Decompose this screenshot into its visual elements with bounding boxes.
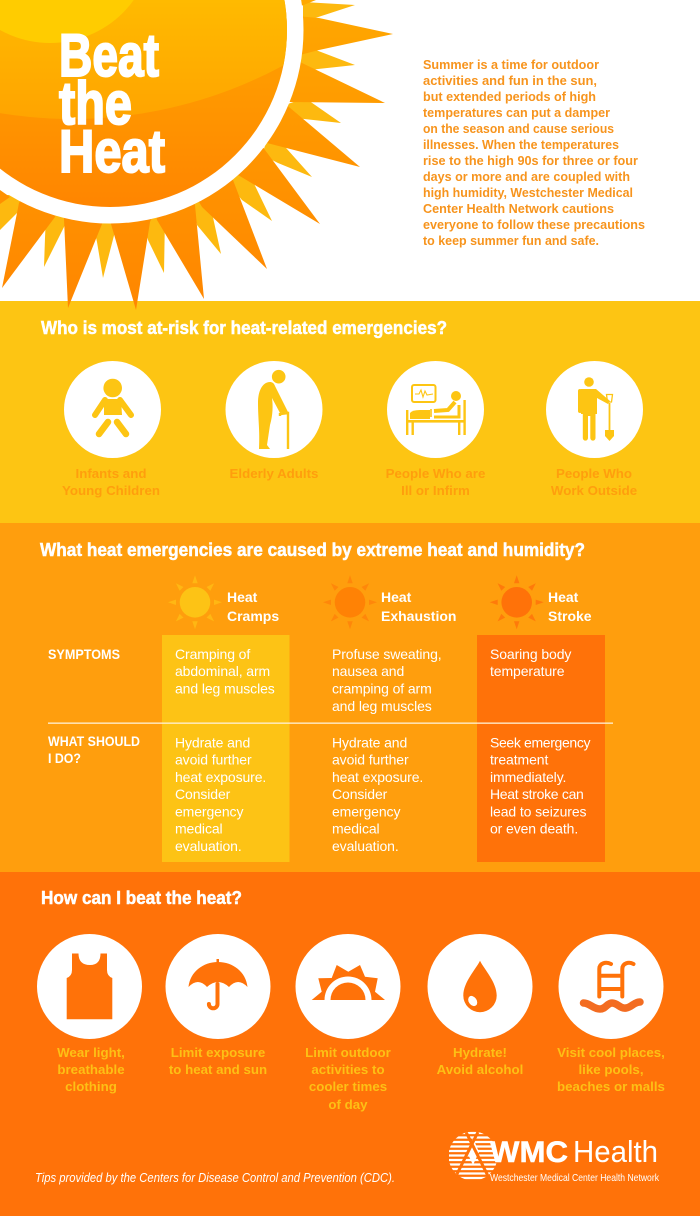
icon: baby: [95, 379, 131, 434]
intro text: illnesses. When the temperatures: [423, 137, 619, 152]
actions: stroke: Heat stroke can: [490, 786, 584, 802]
actions: stroke: or even death.: [490, 820, 578, 836]
label: heat stroke: Heat: [548, 589, 579, 605]
intro text: on the season and cause serious: [423, 121, 614, 136]
intro text: to keep summer fun and safe.: [423, 233, 599, 248]
symptoms: stroke: Soaring body: [490, 646, 571, 662]
symptoms: exhaustion: nausea and: [332, 663, 404, 679]
icon: umbrella: [188, 959, 248, 1008]
sun white ring: [0, 0, 304, 224]
icon: tank top: [67, 954, 112, 1019]
sun disc: [0, 0, 287, 207]
symptoms: cramps: abdominal, arm: [175, 663, 270, 679]
label: Limit outdoor: [305, 1045, 391, 1060]
icon: pool ladder: [584, 963, 640, 1009]
row label: what should I do: I DO?: [48, 750, 81, 766]
label: clothing: [65, 1079, 117, 1094]
symptoms: exhaustion: Profuse sweating,: [332, 646, 442, 662]
icon: sun heat exhaustion: [323, 575, 377, 629]
panel: who is at risk: [0, 301, 700, 523]
intro text: Summer is a time for outdoor: [423, 57, 599, 72]
title: the: [59, 70, 132, 137]
logo: [449, 1132, 660, 1184]
label: Work Outside: [551, 483, 637, 498]
actions: cramps: Hydrate and: [175, 734, 250, 750]
logo: WMC: [490, 1136, 568, 1169]
row label: symptoms: SYMPTOMS: [48, 646, 120, 662]
logo globe: [449, 1132, 497, 1184]
symptoms: cramps: Cramping of: [175, 646, 250, 662]
label: to heat and sun: [169, 1062, 267, 1077]
tip: cooler times: [296, 934, 400, 1112]
actions: exhaustion: Consider: [332, 786, 388, 802]
icon: sun heat cramps: [168, 575, 222, 629]
label: Hydrate!: [453, 1045, 507, 1060]
item: elderly: [226, 361, 322, 481]
actions: cramps: avoid further: [175, 752, 252, 768]
label: Elderly Adults: [230, 466, 318, 481]
intro text: [423, 57, 645, 248]
heading: emergencies: What heat emergencies are caused by extreme heat and humidity?: [40, 539, 585, 560]
logo: Health: [573, 1134, 658, 1169]
tip: sun exposure: [166, 934, 270, 1077]
intro text: but extended periods of high: [423, 89, 596, 104]
intro text: Center Health Network cautions: [423, 201, 614, 216]
symptoms: exhaustion: cramping of arm: [332, 680, 432, 696]
item: ill: [386, 361, 485, 498]
intro text: everyone to follow these precautions: [423, 217, 645, 232]
panel: heat emergencies: [0, 523, 700, 872]
actions: stroke: treatment: [490, 752, 548, 768]
actions: exhaustion: medical: [332, 820, 380, 836]
row label: what should I do: [48, 733, 140, 766]
intro text: days or more and are coupled with: [423, 169, 630, 184]
label: Ill or Infirm: [401, 483, 470, 498]
intro text: high humidity, Westchester Medical: [423, 185, 633, 200]
item: outdoors: [546, 361, 643, 498]
actions: cramps: heat exposure.: [175, 769, 266, 785]
actions: exhaustion: heat exposure.: [332, 769, 423, 785]
actions: cramps: emergency: [175, 804, 243, 820]
label: of day: [328, 1097, 368, 1112]
actions: stroke: Seek emergency: [490, 734, 591, 750]
icon: worker with shovel: [578, 377, 614, 441]
icon: sun heat stroke: [490, 575, 544, 629]
intro text: temperatures can put a damper: [423, 105, 610, 120]
icon: elderly person with cane: [258, 370, 288, 449]
title: Beat: [59, 22, 159, 89]
label: People Who are: [386, 466, 485, 481]
column: heat stroke background: [477, 635, 605, 862]
icon: rising sun: [312, 965, 385, 1000]
source note: Tips provided by the Centers for Disease Control and Prevention (CDC).: [35, 1171, 395, 1185]
actions: cramps: medical: [175, 820, 223, 836]
actions: exhaustion: avoid further: [332, 752, 409, 768]
label: beaches or malls: [557, 1079, 665, 1094]
actions: stroke: lead to seizures: [490, 804, 587, 820]
label: Visit cool places,: [557, 1045, 665, 1060]
heading: at risk: Who is most at-risk for heat-related emergencies?: [41, 317, 447, 338]
panel: how to beat the heat: [0, 872, 700, 1216]
actions: cramps: Consider: [175, 786, 231, 802]
label: Avoid alcohol: [437, 1062, 523, 1077]
logo: Westchester Medical Center Health Network: [490, 1172, 660, 1184]
label: activities to: [311, 1062, 385, 1077]
label: People Who: [556, 466, 632, 481]
tip: cool places: [557, 934, 665, 1094]
actions: exhaustion: emergency: [332, 804, 400, 820]
actions: stroke: immediately.: [490, 769, 566, 785]
title: [59, 22, 165, 185]
label: breathable: [57, 1062, 125, 1077]
label: heat exhaustion: Heat: [381, 589, 412, 605]
tip: hydrate: [428, 934, 532, 1077]
actions: exhaustion: Hydrate and: [332, 734, 407, 750]
label: Young Children: [62, 483, 160, 498]
sun small yellow rays: [0, 2, 355, 278]
label: Limit exposure: [171, 1045, 265, 1060]
label: heat cramps: Heat: [227, 589, 258, 605]
label: like pools,: [578, 1062, 644, 1077]
intro text: rise to the high 90s for three or four: [423, 153, 638, 168]
column: heat cramps background: [162, 635, 290, 862]
item: infants: [62, 361, 161, 498]
label: Wear light,: [57, 1045, 125, 1060]
sun large orange rays: [0, 0, 393, 310]
icon: water drop: [463, 961, 497, 1012]
divider: [48, 722, 613, 724]
symptoms: stroke: temperature: [490, 663, 565, 679]
symptoms: exhaustion: and leg muscles: [332, 698, 432, 714]
icon: hospital bed: [406, 385, 466, 435]
heading: beat the heat: How can I beat the heat?: [41, 887, 242, 908]
actions: exhaustion: evaluation.: [332, 838, 399, 854]
label: cooler times: [309, 1079, 387, 1094]
label: Infants and: [76, 466, 146, 481]
row label: what should I do: WHAT SHOULD: [48, 733, 140, 749]
label: heat stroke: Stroke: [548, 608, 592, 624]
tip: clothing: [37, 934, 142, 1094]
intro text: activities and fun in the sun,: [423, 73, 597, 88]
symptoms: cramps: and leg muscles: [175, 680, 275, 696]
illustration: sun: [0, 0, 393, 310]
label: heat exhaustion: Exhaustion: [381, 608, 456, 624]
title: Heat: [59, 118, 165, 185]
actions: cramps: evaluation.: [175, 838, 242, 854]
label: heat cramps: Cramps: [227, 608, 279, 624]
